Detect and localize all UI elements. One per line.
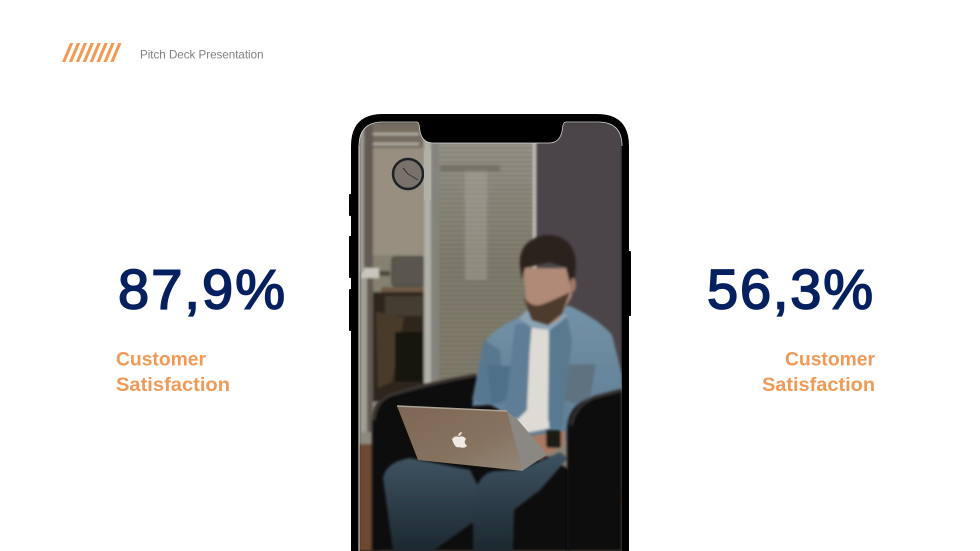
phone notch outline: [359, 122, 622, 146]
phone side buttons: [349, 194, 631, 331]
right statistic value: 56,3%: [707, 258, 873, 320]
phone mockup: [349, 114, 631, 551]
phone body: [351, 114, 629, 551]
armchair: [372, 374, 570, 551]
left statistic label: Customer: [116, 348, 206, 370]
photo background office: [359, 122, 622, 551]
left statistic label: Satisfaction: [116, 374, 230, 396]
right statistic label: Customer: [785, 348, 875, 370]
jeans: [383, 452, 568, 551]
wall clock: [393, 150, 431, 200]
header label: Pitch Deck Presentation: [140, 48, 264, 62]
man: head and hair: [520, 235, 576, 325]
phone screen photo: man with laptop in armchair: [359, 122, 622, 551]
logo: orange diagonal stripes: [62, 43, 122, 62]
phone screen left edge: [358, 146, 360, 551]
left statistic value: 87,9%: [118, 258, 285, 320]
hand and wristwatch: [530, 428, 567, 462]
laptop: [397, 406, 548, 471]
man: denim shirt and white tee: [472, 306, 622, 440]
apple logo: [452, 432, 467, 448]
right statistic label: Satisfaction: [762, 374, 875, 396]
right chair arm: [567, 390, 622, 551]
